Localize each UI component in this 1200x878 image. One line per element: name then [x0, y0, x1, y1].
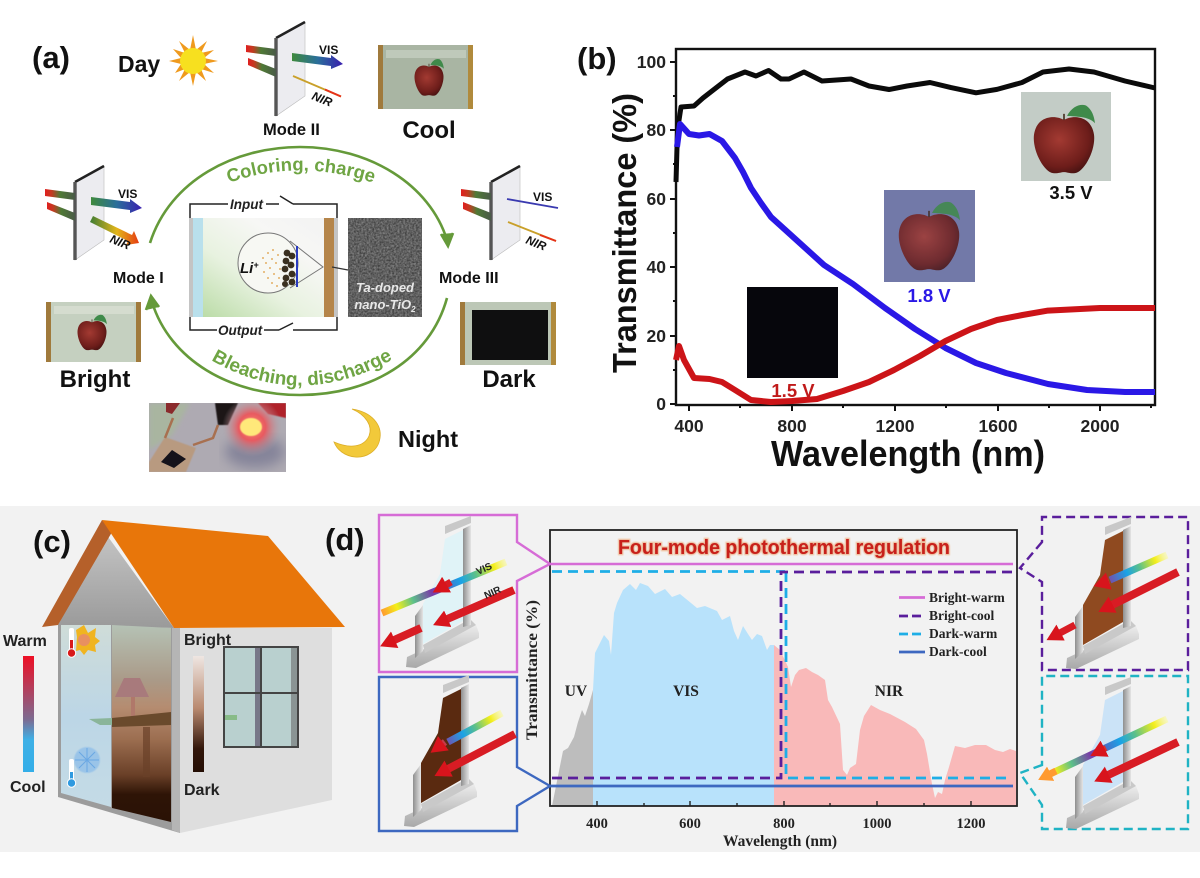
x axis title: Wavelength (nm)	[771, 433, 1045, 474]
photo: bright state	[46, 302, 141, 362]
ticks	[597, 801, 971, 806]
legend: Dark-warm	[929, 626, 998, 641]
callout: bright warm window: NIR	[483, 584, 504, 602]
mode II label: Mode II	[263, 121, 320, 139]
house right wall	[172, 628, 332, 833]
legend	[899, 590, 1005, 659]
cool label: Cool	[402, 117, 456, 144]
x tick labels d	[586, 816, 986, 832]
icon: sun	[169, 35, 218, 86]
output label: Output	[218, 323, 263, 338]
legend: Bright-warm	[929, 590, 1005, 605]
label 1.8 V: 1.8 V	[907, 285, 951, 306]
x tick labels	[674, 416, 1120, 436]
photo: cool state	[378, 45, 473, 109]
light glass pane	[61, 625, 111, 807]
icon: moon	[334, 409, 380, 457]
thermometer warm and sun	[67, 625, 100, 657]
dark glass pane	[112, 625, 171, 822]
panel a label: (a)	[32, 40, 70, 75]
curve: 3.5 V	[676, 69, 1155, 182]
title glow: Four-mode photothermal regulation	[618, 537, 950, 559]
TEM image: nano-TiO	[354, 297, 411, 312]
mode II diagram: VIS	[319, 43, 338, 57]
band labels: UV	[565, 683, 588, 700]
band labels	[565, 683, 904, 700]
x tick labels: 800	[777, 416, 807, 436]
photo: dark state	[460, 302, 556, 365]
day label: Day	[118, 51, 160, 77]
band labels: NIR	[875, 683, 904, 700]
mode III diagram: NIR	[524, 233, 549, 254]
TEM image	[332, 218, 422, 317]
y tick labels	[637, 52, 666, 414]
inset: apple 3.5 V	[1021, 92, 1111, 181]
coloring charge text: Coloring, charge	[227, 158, 374, 182]
spectrum: VIS band	[593, 583, 774, 806]
bright label: Bright	[60, 366, 130, 393]
right electrode	[324, 218, 338, 317]
warm label: Warm	[3, 633, 47, 650]
TEM image: Ta-doped	[356, 280, 415, 295]
line: bright warm	[550, 563, 1013, 565]
curve: 1.8 V	[677, 124, 1155, 392]
mode I diagram: VIS	[118, 187, 137, 201]
mode II diagram	[246, 22, 343, 116]
mode III diagram: VIS	[533, 190, 552, 204]
house left wall frame	[58, 624, 180, 833]
y tick labels: 40	[647, 257, 666, 277]
x tick labels d: 1000	[862, 816, 892, 832]
x tick labels: 1600	[979, 416, 1018, 436]
inset: apple 1.8 V	[884, 190, 975, 282]
y tick labels: 80	[647, 120, 666, 140]
cool label: Cool	[10, 779, 46, 796]
x tick labels d: 400	[586, 816, 608, 832]
legend: Bright-cool	[929, 608, 994, 623]
panel b label: (b)	[577, 41, 617, 76]
circuit wires	[190, 196, 337, 330]
spectrum: UV band	[552, 690, 593, 806]
y axis title d: Transmittance (%)	[524, 600, 541, 740]
y tick labels: 20	[647, 326, 666, 346]
left electrode	[189, 218, 203, 317]
line: dark cool	[550, 785, 1013, 787]
panel a: operating modes	[32, 20, 558, 472]
panel d: four mode regulation	[325, 515, 1188, 850]
title text: Four-mode photothermal regulation	[618, 537, 950, 559]
band labels: VIS	[673, 683, 699, 700]
lamp and table	[89, 678, 171, 777]
inset: dark 1.5 V	[747, 287, 838, 378]
y axis title: Transmittance (%)	[606, 93, 643, 373]
dark label: Dark	[184, 782, 220, 799]
panel b: transmittance chart	[577, 41, 1155, 474]
legend: Dark-cool	[929, 644, 987, 659]
panel c label: (c)	[33, 524, 71, 559]
callout: dark cool window	[379, 675, 550, 831]
line: bright cool	[552, 572, 1014, 778]
magnified view	[238, 233, 323, 293]
night label: Night	[398, 426, 458, 452]
panel d label: (d)	[325, 522, 365, 557]
bright dark scale bar	[193, 656, 204, 772]
x tick labels d: 600	[679, 816, 701, 832]
plot frame	[550, 530, 1017, 806]
spectrum chart	[524, 530, 1017, 850]
mode III diagram	[461, 166, 558, 260]
callout: bright warm window	[379, 515, 550, 672]
callout: dark warm window	[1020, 676, 1188, 829]
arrow: coloring charge	[150, 147, 453, 246]
house gable	[58, 534, 174, 628]
bleaching discharge text: Bleaching, discharge	[212, 349, 391, 390]
lower panel background	[0, 506, 1200, 852]
x axis title d: Wavelength (nm)	[723, 833, 837, 850]
TEM image: 2	[410, 305, 416, 314]
li ion label: Li	[240, 260, 253, 277]
warm cool scale bar	[23, 656, 34, 772]
x tick labels: 1200	[876, 416, 915, 436]
x tick labels d: 1200	[956, 816, 986, 832]
spectrum: NIR band	[774, 645, 1016, 806]
x tick labels d: 800	[773, 816, 795, 832]
mode III label: Mode III	[439, 270, 499, 287]
mode I label: Mode I	[113, 270, 164, 287]
callout: bright cool window	[1020, 517, 1188, 670]
y tick labels: 100	[637, 52, 666, 72]
x tick labels: 2000	[1081, 416, 1120, 436]
input label: Input	[230, 197, 263, 212]
wall corner	[172, 628, 180, 833]
mode I diagram: NIR	[108, 232, 133, 253]
curve: 1.5 V	[676, 308, 1155, 402]
arrow: bleaching discharge	[146, 296, 447, 395]
photo: night led demo	[149, 397, 286, 472]
battery cell schematic	[189, 196, 422, 338]
bright label: Bright	[184, 632, 232, 649]
dark label: Dark	[482, 366, 536, 393]
callout: bright warm window: VIS	[475, 561, 494, 578]
label 3.5 V: 3.5 V	[1049, 182, 1093, 203]
house window	[224, 647, 298, 747]
roof main	[102, 520, 345, 628]
y tick labels: 60	[647, 189, 666, 209]
thermometer cool and snowflake	[67, 747, 100, 787]
x tick labels: 400	[674, 416, 704, 436]
li ion label: +	[253, 260, 259, 270]
mode I diagram	[45, 166, 142, 260]
line: dark warm	[552, 572, 1012, 778]
chart axes	[670, 49, 1155, 411]
mode II diagram: NIR	[310, 89, 335, 110]
label 1.5 V: 1.5 V	[771, 380, 815, 401]
cell body	[189, 218, 337, 317]
panel c: house illustration	[3, 520, 345, 833]
y tick labels: 0	[656, 394, 666, 414]
roof side	[42, 520, 112, 627]
